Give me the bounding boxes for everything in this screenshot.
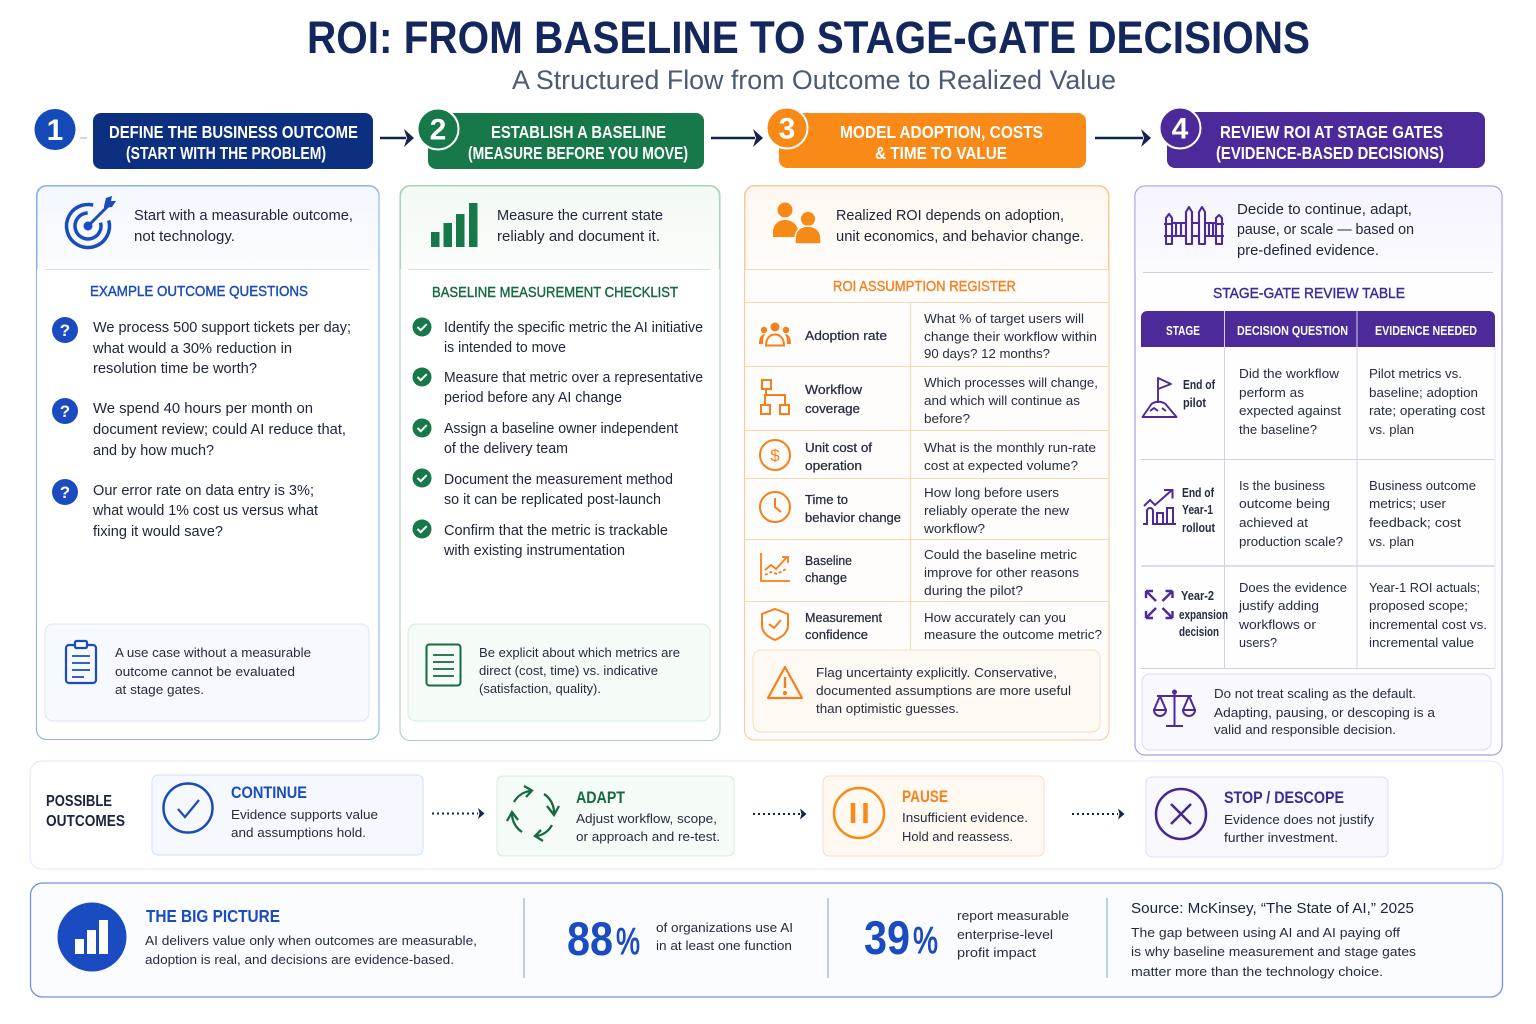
row: workflow coverage: and which will continue as <box>924 393 1081 408</box>
intro text <box>1237 202 1414 259</box>
card: adapt: or approach and re-test. <box>576 829 720 844</box>
panel: define outcome <box>36 186 379 740</box>
callout: direct vs indicative metrics: Be explicit about which metrics are <box>479 645 680 660</box>
row: measurement confidence: confidence <box>805 627 868 642</box>
row: adoption rate: 90 days? 12 months? <box>924 346 1050 361</box>
question 3: fixing it would save? <box>93 524 223 540</box>
row: adoption rate <box>759 311 1097 361</box>
stat: 39%: report measurable <box>957 908 1069 923</box>
stat: 88% <box>567 912 793 965</box>
arrow: adapt to pause <box>753 808 806 820</box>
row: unit cost: operation <box>805 458 862 473</box>
row: workflow coverage: before? <box>924 411 970 426</box>
row: end of year-1 rollout: metrics; user <box>1369 496 1447 511</box>
row: year-2 expansion decision: Does the evidence <box>1239 580 1347 595</box>
question 3: Our error rate on data entry is 3%; <box>93 483 314 499</box>
source note: The gap between using AI and AI paying off <box>1131 925 1400 940</box>
table header row <box>1141 311 1495 347</box>
intro text: unit economics, and behavior change. <box>836 229 1084 245</box>
row: time to behavior change: behavior change <box>805 510 901 525</box>
intro text: reliably and document it. <box>497 229 660 245</box>
checklist item 1: is intended to move <box>444 340 566 356</box>
step 1 header: (START WITH THE PROBLEM) <box>126 143 326 163</box>
step 3 header: & TIME TO VALUE <box>875 143 1007 163</box>
icon: clipboard <box>66 641 96 683</box>
stat: 88%: of organizations use AI <box>656 920 793 935</box>
arrow: step 2 to step 3 <box>711 129 763 147</box>
card: stop / descope <box>1146 777 1388 857</box>
row: baseline change: change <box>805 570 847 585</box>
callout: flag uncertainty: Flag uncertainty explicitly. Conservative, <box>816 665 1057 680</box>
row: unit cost: $ <box>770 446 780 465</box>
row: end of year-1 rollout: vs. plan <box>1369 534 1414 549</box>
row: year-2 expansion decision: incremental cost vs. <box>1369 617 1487 632</box>
checklist item 4: so it can be replicated post-launch <box>444 492 661 508</box>
stage-gate table <box>1141 311 1495 668</box>
row: baseline change <box>761 547 1080 598</box>
row: workflow coverage <box>761 375 1098 426</box>
row: end of pilot: Did the workflow <box>1239 366 1340 381</box>
row: end of pilot: vs. plan <box>1369 422 1414 437</box>
row: year-2 expansion decision: Year-2 <box>1181 589 1214 603</box>
callout: flag uncertainty <box>753 650 1100 732</box>
callout: stage gates: A use case without a measurable <box>115 645 311 660</box>
card: adapt: Adjust workflow, scope, <box>576 811 717 826</box>
question 1: We process 500 support tickets per day; <box>93 320 351 336</box>
card: adapt: ADAPT <box>576 789 625 807</box>
row: workflow coverage: Which processes will change, <box>924 375 1098 390</box>
heading: checklist: BASELINE MEASUREMENT CHECKLIST <box>432 285 678 301</box>
row: year-2 expansion decision <box>1146 580 1487 650</box>
stat: 39% <box>864 908 1069 964</box>
label: possible outcomes: POSSIBLE <box>46 793 112 810</box>
step 1 header <box>34 109 373 169</box>
icon: stage gate <box>1164 207 1224 244</box>
stat: 39%: 39 <box>864 911 910 964</box>
row: time to behavior change <box>760 485 1070 536</box>
icon: warning triangle <box>768 667 802 698</box>
source note <box>1131 901 1417 979</box>
card: continue: and assumptions hold. <box>231 825 366 840</box>
intro text: pre-defined evidence. <box>1237 243 1379 259</box>
question 3: what would 1% cost us versus what <box>92 503 318 519</box>
callout: scaling is not default: valid and responsible decision. <box>1214 722 1396 737</box>
row: end of year-1 rollout: Business outcome <box>1369 478 1476 493</box>
row: end of pilot: baseline; adoption <box>1369 385 1478 400</box>
heading: ROI assumption register: ROI ASSUMPTION REGISTER <box>833 279 1016 295</box>
row: end of year-1 rollout: outcome being <box>1239 496 1330 511</box>
row: year-2 expansion decision: users? <box>1239 635 1277 650</box>
panel: model adoption <box>744 186 1109 740</box>
callout: scaling is not default <box>1142 674 1491 750</box>
row: adoption rate: change their workflow within <box>924 329 1097 344</box>
row: end of year-1 rollout: End of <box>1182 486 1215 500</box>
row: time to behavior change: Time to <box>805 492 848 507</box>
intro text: not technology. <box>134 229 235 245</box>
callout: stage gates <box>45 624 369 721</box>
step 1 header: DEFINE THE BUSINESS OUTCOME <box>109 122 358 142</box>
checklist item 4 <box>412 468 673 508</box>
row: year-2 expansion decision: incremental value <box>1369 635 1474 650</box>
intro text: Start with a measurable outcome, <box>134 208 353 224</box>
icon: pause circle <box>834 788 884 838</box>
stat: 39%: % <box>913 920 938 961</box>
source note: Source: McKinsey, “The State of AI,” 2025 <box>1131 901 1414 917</box>
row: end of pilot: End of <box>1183 378 1216 392</box>
icon: check circle <box>164 784 212 832</box>
checklist item 2: period before any AI change <box>444 390 622 406</box>
callout: flag uncertainty: documented assumptions are more useful <box>816 683 1071 698</box>
intro text <box>836 208 1084 245</box>
icon: x circle <box>1156 789 1206 839</box>
label: possible outcomes <box>46 793 125 830</box>
row: end of pilot: Pilot metrics vs. <box>1369 366 1462 381</box>
row: end of pilot <box>1142 366 1485 437</box>
question 1: ? <box>60 321 70 340</box>
question 2: and by how much? <box>93 443 214 459</box>
arrow: step 3 to step 4 <box>1095 129 1151 147</box>
big picture text: AI delivers value only when outcomes are measurable, <box>145 933 477 948</box>
intro text: Decide to continue, adapt, <box>1237 202 1412 218</box>
checklist item 5 <box>412 520 668 559</box>
row: end of pilot: the baseline? <box>1239 422 1317 437</box>
row: measurement confidence: measure the outcome metric? <box>924 627 1102 642</box>
assumption register table <box>745 302 1109 650</box>
card: stop / descope: Evidence does not justify <box>1224 812 1375 827</box>
subtitle: A Structured Flow from Outcome to Realized Value <box>512 65 1116 95</box>
intro text <box>134 208 353 245</box>
row: end of pilot: pilot <box>1183 396 1207 410</box>
row: workflow coverage: Workflow <box>805 382 863 397</box>
row: end of year-1 rollout <box>1143 478 1476 549</box>
callout: flag uncertainty: than optimistic guesses. <box>816 701 959 716</box>
arrow: step 1 to step 2 <box>380 129 414 147</box>
card: continue: CONTINUE <box>231 784 307 802</box>
question 1: what would a 30% reduction in <box>92 341 292 357</box>
checklist item 4: Document the measurement method <box>444 472 673 488</box>
step 2 header: ESTABLISH A BASELINE <box>491 122 666 142</box>
big picture text: THE BIG PICTURE <box>146 906 280 926</box>
heading: stage-gate review table: STAGE-GATE REVIEW TABLE <box>1213 286 1405 302</box>
icon: scales <box>1154 690 1195 726</box>
row: baseline change: Baseline <box>805 553 852 568</box>
icon: bar chart circle <box>58 902 126 972</box>
card: adapt <box>497 776 734 856</box>
callout: direct vs indicative metrics: (satisfaction, quality). <box>479 681 601 696</box>
checklist item 1: Identify the specific metric the AI initiative <box>444 320 703 336</box>
stat: 39%: profit impact <box>957 945 1036 960</box>
row: end of pilot: rate; operating cost <box>1369 403 1485 418</box>
row: time to behavior change: reliably operate the new <box>924 503 1070 518</box>
card: pause <box>823 776 1044 856</box>
row: workflow coverage: coverage <box>805 401 860 416</box>
intro text: Realized ROI depends on adoption, <box>836 208 1064 224</box>
callout: scaling is not default: Do not treat scaling as the default. <box>1214 686 1416 701</box>
row: baseline change: during the pilot? <box>924 583 1023 598</box>
card: pause: PAUSE <box>902 788 948 806</box>
panel: possible outcomes <box>30 761 1503 869</box>
row: year-2 expansion decision: proposed scope; <box>1369 598 1468 613</box>
question 2: We spend 40 hours per month on <box>93 401 313 417</box>
title: ROI: FROM BASELINE TO STAGE-GATE DECISIONS <box>307 12 1310 63</box>
checklist item 5: with existing instrumentation <box>443 543 625 559</box>
step 3 header: 3 <box>779 112 795 146</box>
callout: stage gates: at stage gates. <box>115 682 204 697</box>
row: year-2 expansion decision: justify adding <box>1238 598 1319 613</box>
checklist item 3: Assign a baseline owner independent <box>444 421 678 437</box>
checklist item 2: Measure that metric over a representative <box>444 370 703 386</box>
checklist item 3: of the delivery team <box>444 441 568 457</box>
checklist item 5: Confirm that the metric is trackable <box>444 523 668 539</box>
row: time to behavior change: How long before users <box>924 485 1060 500</box>
row: end of year-1 rollout: Year-1 <box>1182 503 1213 517</box>
row: end of year-1 rollout: production scale? <box>1239 534 1343 549</box>
row: time to behavior change: workflow? <box>923 521 985 536</box>
intro text <box>497 208 663 245</box>
step 1 header: 1 <box>47 114 63 147</box>
panel: review ROI <box>1135 186 1502 755</box>
intro text: Measure the current state <box>497 208 663 224</box>
icon: document <box>426 644 460 686</box>
row: end of pilot: perform as <box>1239 385 1305 400</box>
question 3: ? <box>60 483 70 502</box>
card: continue <box>152 775 423 855</box>
row: measurement confidence: Measurement <box>805 610 882 625</box>
row: adoption rate: Adoption rate <box>805 328 887 343</box>
question 3 <box>52 479 318 540</box>
step 3 header <box>766 108 1086 168</box>
row: measurement confidence <box>762 609 1102 642</box>
step 4 header: (EVIDENCE-BASED DECISIONS) <box>1216 143 1444 163</box>
checklist item 1 <box>412 318 703 356</box>
table header row: DECISION QUESTION <box>1237 323 1348 338</box>
stat: 39%: enterprise-level <box>957 927 1053 942</box>
callout: direct vs indicative metrics <box>408 624 710 721</box>
checklist item 3 <box>412 418 678 457</box>
row: year-2 expansion decision: Year-1 ROI actuals; <box>1369 580 1480 595</box>
step 4 header: 4 <box>1172 112 1189 146</box>
checklist item 2 <box>412 368 703 406</box>
row: end of year-1 rollout: rollout <box>1182 521 1216 535</box>
step 2 header <box>418 108 704 169</box>
step 3 header: MODEL ADOPTION, COSTS <box>840 122 1043 142</box>
row: end of year-1 rollout: Is the business <box>1239 478 1325 493</box>
icon: cycle arrows <box>507 786 559 841</box>
card: pause: Insufficient evidence. <box>902 810 1028 825</box>
question 1 <box>52 317 351 377</box>
row: baseline change: Could the baseline metric <box>924 547 1078 562</box>
row: unit cost <box>760 440 1096 473</box>
stat: 88%: 88 <box>567 912 613 965</box>
step 4 header: REVIEW ROI AT STAGE GATES <box>1220 122 1443 142</box>
card: stop / descope: further investment. <box>1224 830 1338 845</box>
question 1: resolution time be worth? <box>93 361 257 377</box>
arrow: continue to adapt <box>432 808 484 819</box>
row: unit cost: Unit cost of <box>805 440 872 455</box>
icon: people <box>773 202 821 244</box>
row: year-2 expansion decision: decision <box>1179 625 1219 639</box>
table header row: STAGE <box>1166 323 1200 338</box>
callout: direct vs indicative metrics: direct (cost, time) vs. indicative <box>479 663 658 678</box>
table header row: EVIDENCE NEEDED <box>1375 323 1477 338</box>
row: end of year-1 rollout: achieved at <box>1239 515 1308 530</box>
source note: is why baseline measurement and stage gates <box>1131 944 1417 959</box>
panel: the big picture <box>30 883 1502 997</box>
row: baseline change: improve for other reasons <box>924 565 1080 580</box>
question 2 <box>52 398 346 459</box>
panel: establish baseline <box>400 186 720 740</box>
intro text: pause, or scale — based on <box>1237 222 1414 238</box>
source note: matter more than the technology choice. <box>1131 964 1383 979</box>
row: year-2 expansion decision: expansion <box>1179 608 1228 622</box>
stat: 88%: in at least one function <box>656 938 792 953</box>
label: possible outcomes: OUTCOMES <box>46 813 125 830</box>
row: end of pilot: expected against <box>1239 403 1341 418</box>
card: pause: Hold and reassess. <box>902 829 1013 844</box>
question 2: document review; could AI reduce that, <box>93 422 346 438</box>
big picture text: adoption is real, and decisions are evidence-based. <box>145 952 454 967</box>
icon: target <box>62 196 116 252</box>
stat: 88%: % <box>616 921 640 962</box>
arrow: pause to stop <box>1072 808 1124 820</box>
row: year-2 expansion decision: workflows or <box>1238 617 1317 632</box>
card: stop / descope: STOP / DESCOPE <box>1224 789 1344 807</box>
row: unit cost: What is the monthly run-rate <box>924 440 1096 455</box>
heading: example outcome questions: EXAMPLE OUTCOME QUESTIONS <box>90 284 308 300</box>
callout: stage gates: outcome cannot be evaluated <box>115 664 295 679</box>
question 2: ? <box>60 402 70 421</box>
row: end of year-1 rollout: feedback; cost <box>1369 515 1461 530</box>
callout: scaling is not default: Adapting, pausing, or descoping is a <box>1214 705 1436 720</box>
step 2 header: (MEASURE BEFORE YOU MOVE) <box>468 143 688 163</box>
card: continue: Evidence supports value <box>231 807 378 822</box>
icon: bar chart <box>431 203 478 247</box>
step 2 header: 2 <box>430 114 446 146</box>
step 4 header <box>1160 108 1485 168</box>
big picture text <box>145 906 477 967</box>
row: measurement confidence: How accurately can you <box>924 610 1066 625</box>
row: adoption rate: What % of target users will <box>924 311 1084 326</box>
row: unit cost: cost at expected volume? <box>924 458 1078 473</box>
